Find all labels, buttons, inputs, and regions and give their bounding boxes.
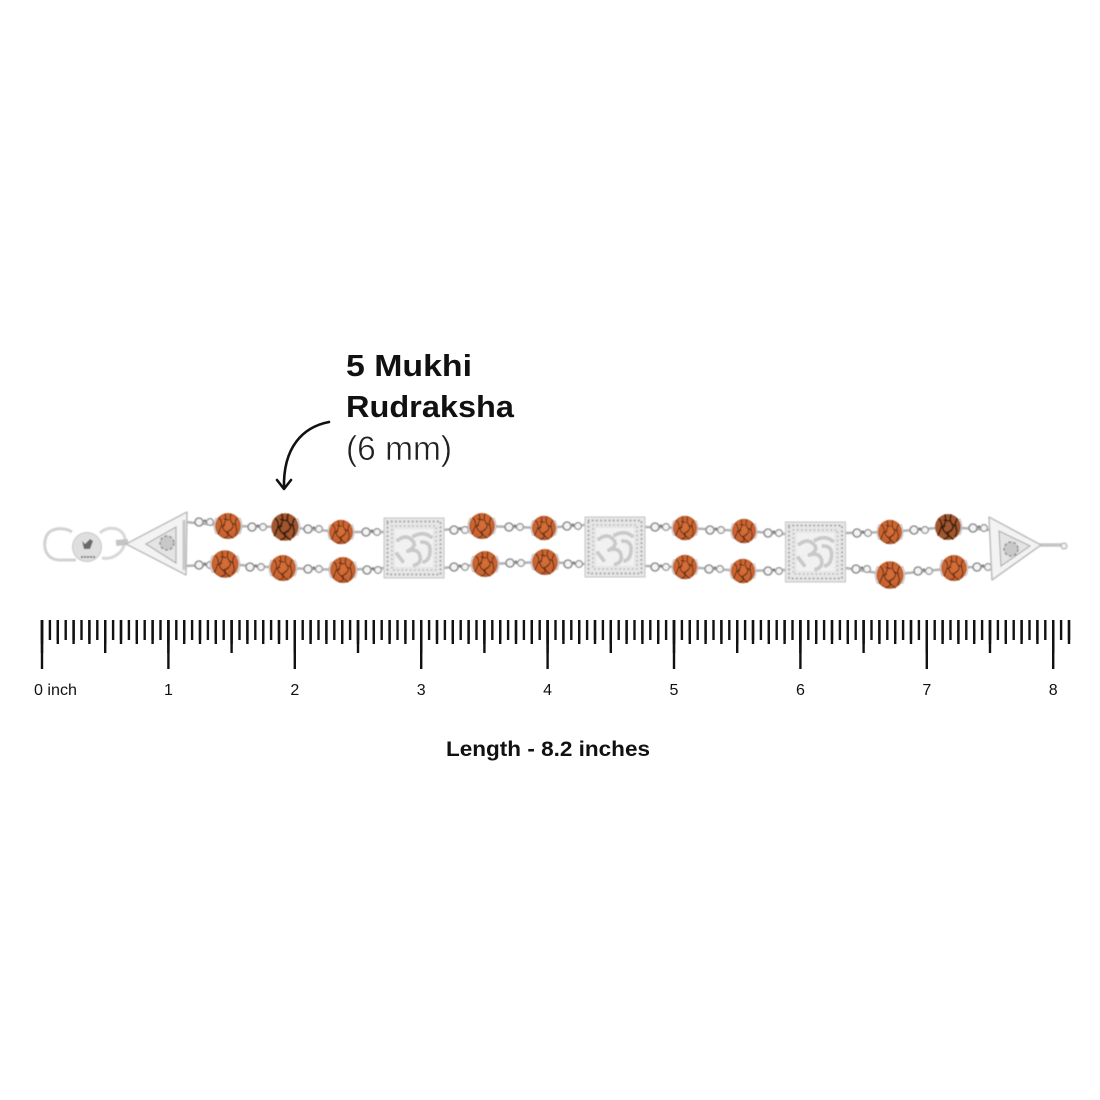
ruler labels: 4 (543, 682, 552, 699)
left triangle connector (126, 512, 187, 575)
plaque: om square 3 (786, 522, 846, 582)
ruler labels: 1 (164, 682, 173, 699)
ruler labels (34, 682, 1058, 699)
rudraksha beads: top row (214, 513, 962, 544)
ruler labels: 2 (290, 682, 299, 699)
ruler ticks (41, 630, 1071, 644)
callout heading: 5 Mukhi (346, 348, 472, 383)
chain wires (185, 522, 992, 575)
ruler labels: 3 (417, 682, 426, 699)
ruler labels: 0 inch (34, 682, 77, 699)
clasp: hook rings and stamped disc (45, 528, 128, 562)
arrow: curved pointer to bead (277, 422, 329, 489)
ruler (34, 630, 1071, 699)
plaque: om square 2 (585, 517, 645, 577)
length caption: Length - 8.2 inches (446, 738, 650, 761)
right triangle connector with end stub (989, 517, 1067, 580)
ruler labels: 6 (796, 682, 805, 699)
rudraksha beads: bottom row (210, 549, 968, 589)
callout heading line 2: Rudraksha (346, 389, 515, 424)
plaque: om square 1 (384, 518, 444, 578)
callout size: (6 mm) (346, 430, 452, 468)
ruler labels: 7 (922, 682, 931, 699)
chain rings (195, 518, 991, 575)
bracelet (45, 512, 1067, 589)
ruler labels: 5 (670, 682, 679, 699)
callout: 5 Mukhi Rudraksha (6 mm) (346, 348, 515, 468)
ruler labels: 8 (1049, 682, 1058, 699)
